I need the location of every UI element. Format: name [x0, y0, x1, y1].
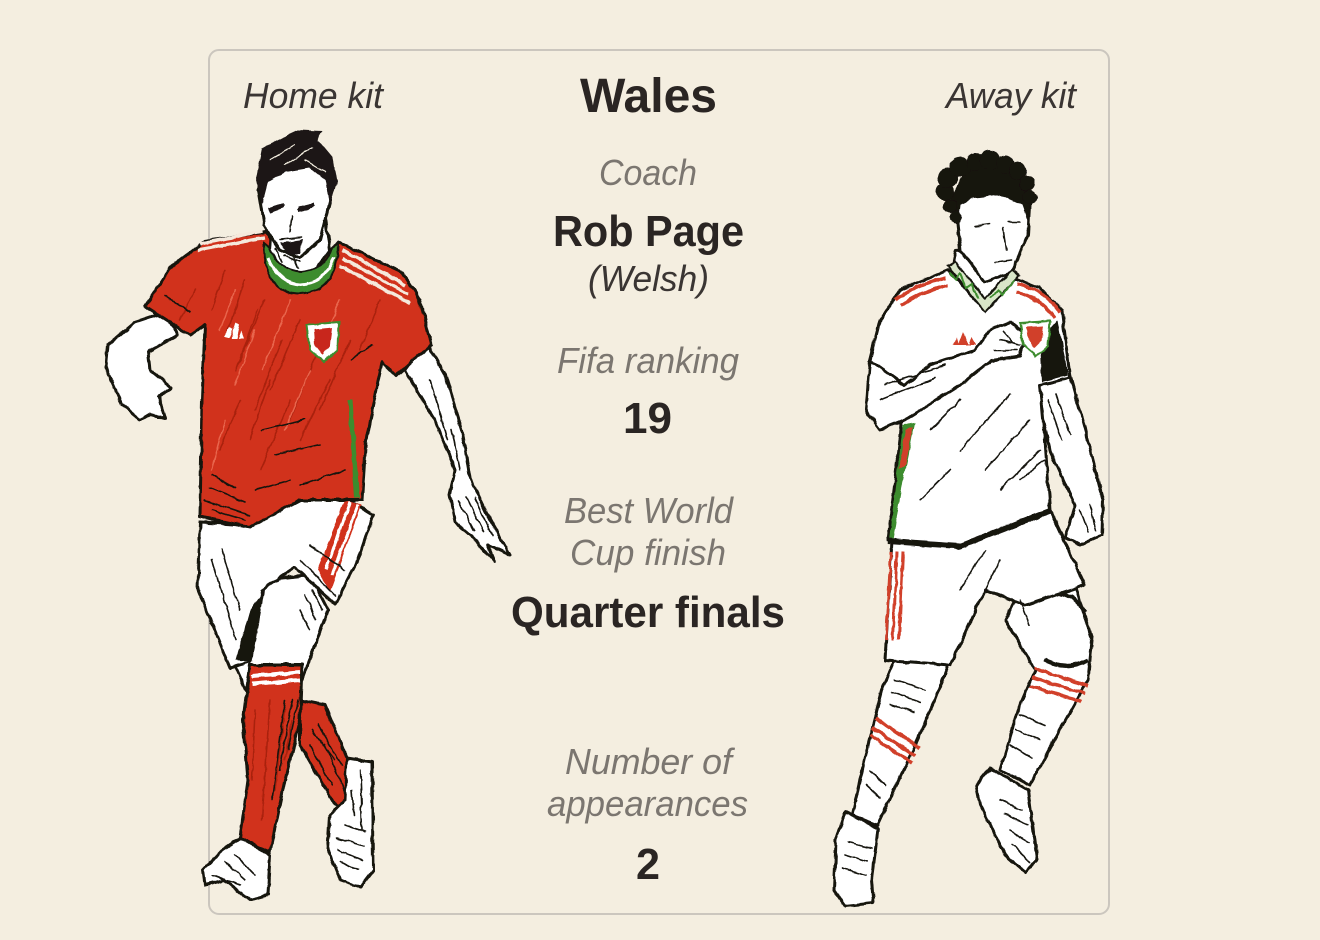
- neck and face: [270, 215, 330, 275]
- text block: best world cup finish: Quarter finals: [511, 588, 785, 637]
- label: home kit: Home kit: [243, 75, 385, 116]
- collar: [948, 262, 1019, 312]
- neck and face: [952, 245, 1012, 300]
- text block: fifa ranking: [557, 340, 739, 443]
- front thigh: [232, 575, 328, 700]
- illustration: player in away kit: [834, 150, 1103, 906]
- text block: number of appearances: Number of: [565, 741, 736, 782]
- text block: number of appearances: 2: [636, 840, 660, 889]
- collar: [264, 243, 338, 294]
- back leg and sock: [300, 700, 352, 812]
- text block: coach: (Welsh): [588, 258, 709, 299]
- text block: fifa ranking: 19: [623, 394, 672, 443]
- text block: best world cup finish: Best World: [564, 490, 734, 531]
- jersey red shoulder stripes: [895, 278, 1060, 318]
- text block: coach: Rob Page: [553, 207, 744, 256]
- left shin and sock: [852, 660, 950, 825]
- side stripe: [350, 400, 357, 498]
- panel: card border: [209, 50, 1109, 914]
- jersey shading: [180, 270, 380, 470]
- front boot: [203, 838, 270, 900]
- text block: best world cup finish: Cup finish: [570, 532, 726, 573]
- text block: number of appearances: appearances: [547, 783, 748, 824]
- jersey: [145, 232, 431, 527]
- shorts: [198, 498, 373, 668]
- crest: [1020, 321, 1050, 356]
- right boot: [976, 768, 1037, 872]
- right thigh, shin and sock: [1000, 585, 1092, 785]
- adidas logo: [952, 332, 976, 345]
- side panel: [889, 422, 915, 540]
- shorts: [885, 510, 1085, 665]
- front sock: [240, 665, 302, 852]
- text block: fifa ranking: Fifa ranking: [557, 340, 739, 381]
- hair: [256, 130, 337, 205]
- right arm: [405, 340, 510, 562]
- text block: coach: Coach: [599, 152, 697, 193]
- jersey: [870, 270, 1070, 545]
- text block: number of appearances: [547, 741, 748, 889]
- label: away kit: Away kit: [944, 75, 1078, 116]
- text block: best world cup finish: [511, 490, 785, 637]
- adidas logo: [224, 322, 244, 338]
- title: Wales: [580, 70, 717, 123]
- shoulder stripes: [198, 231, 410, 303]
- crest: [307, 322, 339, 362]
- left arm: [106, 312, 178, 420]
- text block: coach: [553, 152, 744, 299]
- jersey hem: [888, 511, 1050, 546]
- curly hair: [936, 150, 1037, 223]
- left boot: [834, 812, 878, 906]
- forearm: [866, 322, 1026, 430]
- back boot: [328, 758, 373, 887]
- sleeve shading: [1040, 320, 1068, 382]
- back arm: [1035, 375, 1103, 545]
- illustration: player in home kit: [106, 130, 510, 900]
